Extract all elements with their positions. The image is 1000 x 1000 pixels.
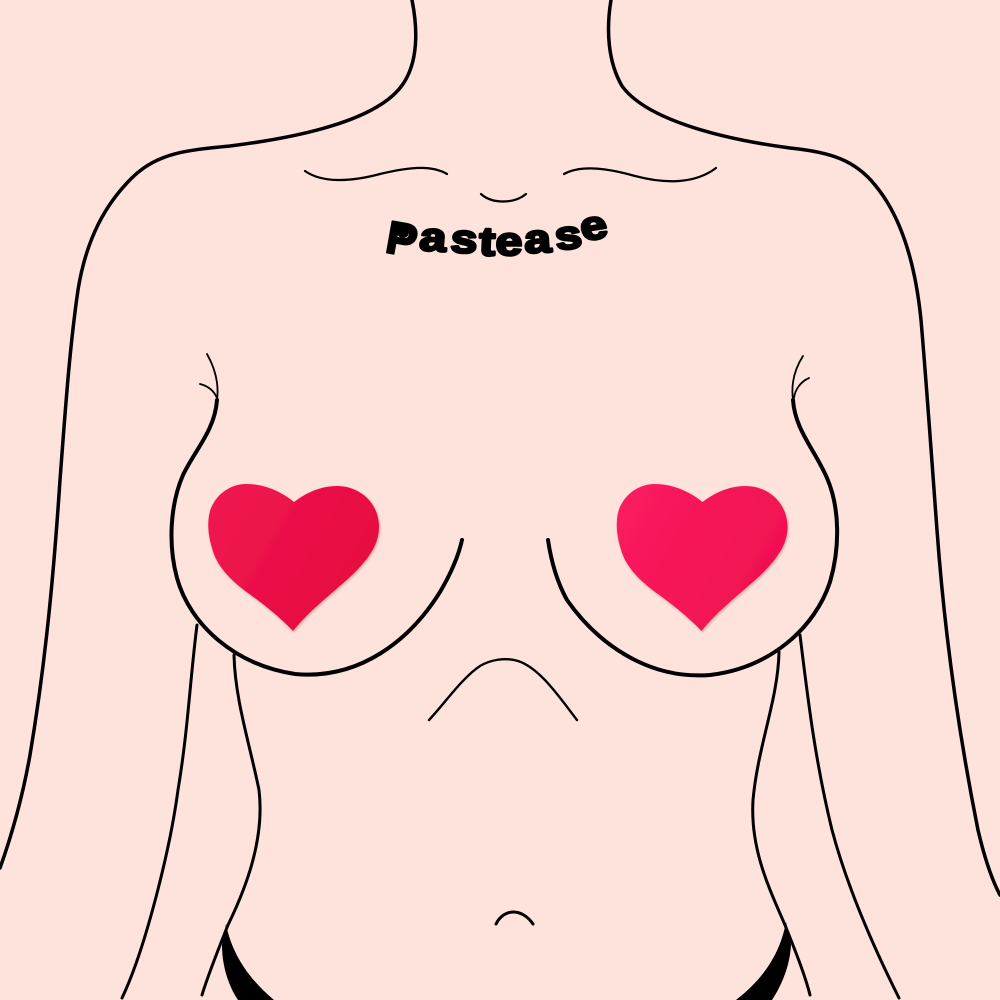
right inner arm line — [800, 635, 899, 998]
underwear left — [222, 924, 274, 1000]
right waist line — [753, 652, 810, 995]
right breast contour — [548, 400, 837, 675]
left heart pastie — [208, 484, 379, 631]
logo initial: P — [382, 211, 422, 267]
right heart pastie — [617, 484, 788, 631]
navel — [496, 912, 533, 924]
right neck and shoulder line — [609, 0, 1000, 895]
logo letters: astease — [418, 202, 611, 265]
underwear right — [736, 922, 791, 1000]
left armpit crease — [200, 354, 218, 400]
left inner arm line — [122, 625, 197, 998]
left breast contour — [171, 400, 462, 675]
logo: Pastease — [382, 202, 611, 267]
logo initial counter fill — [397, 226, 409, 238]
rib arch — [429, 659, 577, 720]
right collarbone — [564, 168, 716, 181]
left waist line — [202, 655, 260, 995]
right armpit crease — [792, 356, 809, 400]
sternum notch — [481, 194, 526, 202]
left collarbone — [305, 168, 447, 180]
left neck and shoulder line — [0, 0, 416, 868]
